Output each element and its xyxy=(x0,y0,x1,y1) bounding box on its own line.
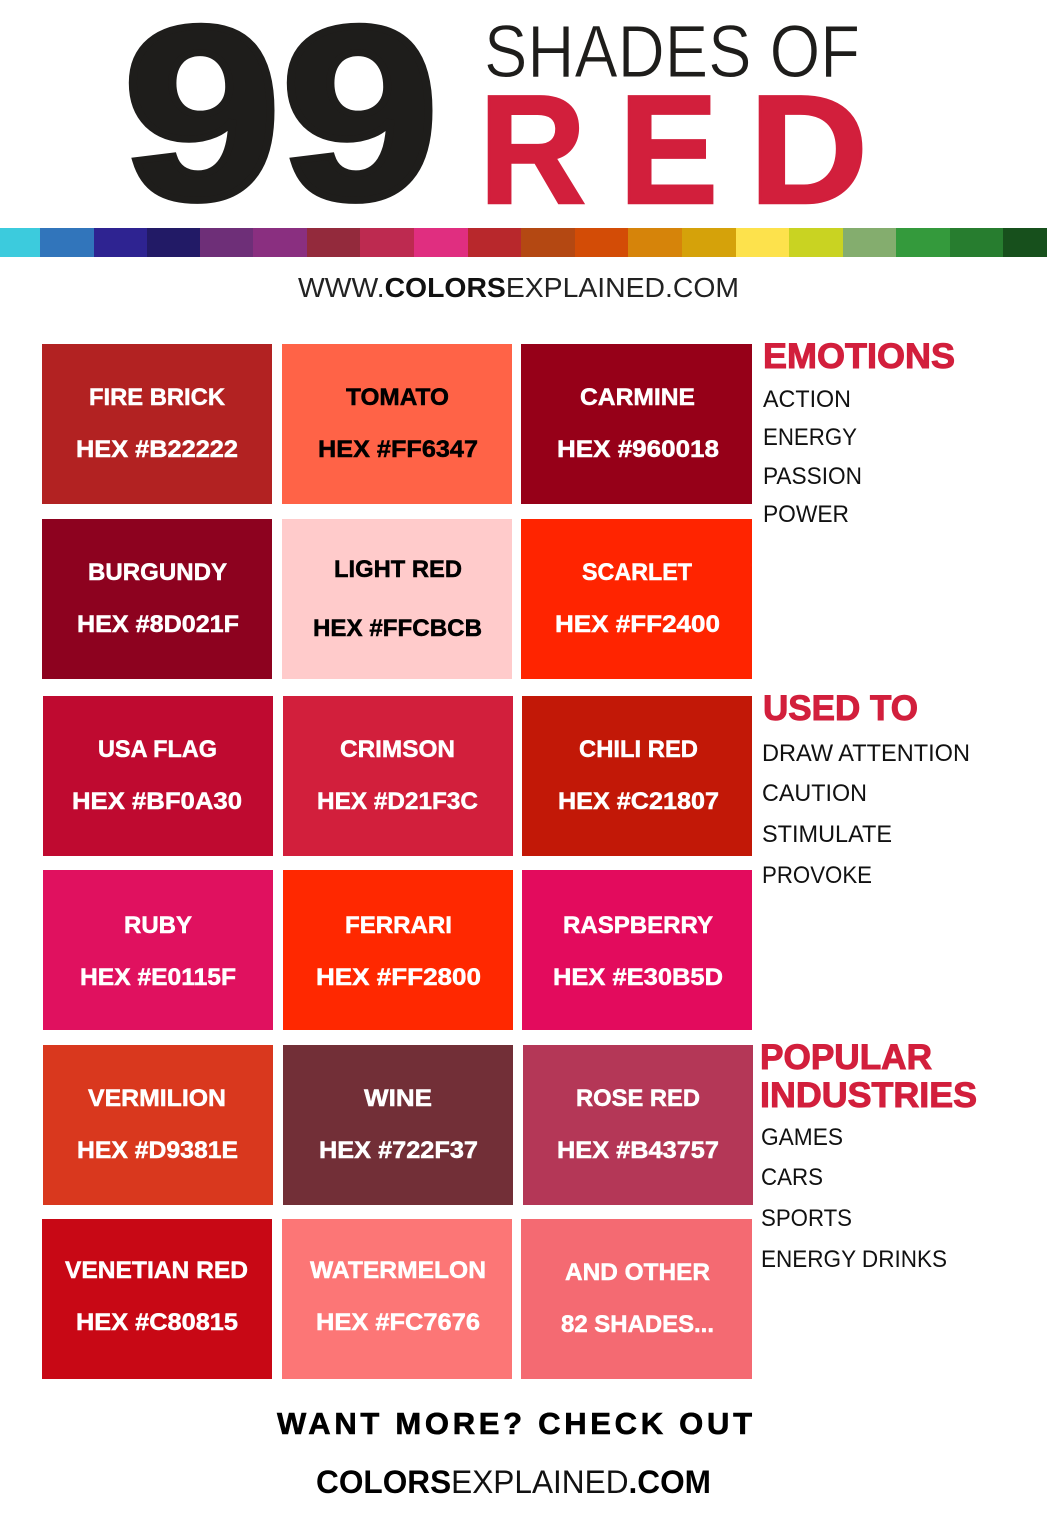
tile: carmine xyxy=(521,344,752,504)
heading: emotions: EMOTIONS xyxy=(763,337,955,376)
tile: chili red: HEX #C21807 xyxy=(558,788,719,815)
panel: emotions: POWER xyxy=(763,501,849,528)
panel: popular industries: ENERGY DRINKS xyxy=(761,1246,947,1273)
tile: wine: HEX #722F37 xyxy=(319,1137,478,1164)
tile: fire brick: FIRE BRICK xyxy=(89,384,225,411)
tile: burgundy: HEX #8D021F xyxy=(77,611,239,638)
panel: emotions: PASSION xyxy=(763,463,862,490)
tile: fire brick xyxy=(42,344,272,504)
tile: tomato xyxy=(282,344,512,504)
tile: rose red xyxy=(523,1045,753,1205)
tile: scarlet: HEX #FF2400 xyxy=(555,611,720,638)
tile: crimson xyxy=(283,696,513,856)
tile: usa flag xyxy=(43,696,273,856)
tile: scarlet xyxy=(521,519,752,679)
tile: tomato: HEX #FF6347 xyxy=(318,436,478,463)
tile: carmine: HEX #960018 xyxy=(557,436,719,463)
tile: carmine: CARMINE xyxy=(580,384,695,411)
title: red: D xyxy=(749,63,868,236)
panel: emotions: ACTION xyxy=(763,386,851,413)
tile: raspberry xyxy=(522,870,752,1030)
tile: ferrari: HEX #FF2800 xyxy=(316,964,481,991)
panel: popular industries: SPORTS xyxy=(761,1205,852,1232)
tile: other shades: 82 SHADES... xyxy=(561,1311,714,1338)
tile: vermilion: VERMILION xyxy=(88,1085,226,1112)
tile: watermelon: HEX #FC7676 xyxy=(316,1309,480,1336)
heading: used to: USED TO xyxy=(763,689,918,728)
rainbow colour strip xyxy=(0,228,1047,257)
title: red xyxy=(479,63,868,236)
call to action: WANT MORE? CHECK OUT xyxy=(277,1406,752,1441)
tile: light red: HEX #FFCBCB xyxy=(313,615,482,642)
tile: crimson: CRIMSON xyxy=(340,736,455,763)
tile: wine: WINE xyxy=(364,1085,432,1112)
tile: watermelon: WATERMELON xyxy=(310,1257,486,1284)
tile: usa flag: USA FLAG xyxy=(98,736,217,763)
title: red: E xyxy=(619,63,718,236)
title: red: R xyxy=(479,63,586,236)
website url: WWW.COLORSEXPLAINED.COM xyxy=(298,272,739,303)
tile: rose red: HEX #B43757 xyxy=(557,1137,719,1164)
panel: popular industries: CARS xyxy=(761,1164,823,1191)
tile: wine xyxy=(283,1045,513,1205)
tile: other shades xyxy=(521,1219,752,1379)
tile: light red: LIGHT RED xyxy=(334,556,462,583)
tile: ruby: HEX #E0115F xyxy=(80,964,236,991)
panel: used to: STIMULATE xyxy=(762,821,892,848)
tile: venetian red: HEX #C80815 xyxy=(76,1309,238,1336)
tile: tomato: TOMATO xyxy=(346,384,449,411)
panel: used to xyxy=(762,689,970,889)
tile: usa flag: HEX #BF0A30 xyxy=(72,788,242,815)
heading: popular industries: POPULAR xyxy=(760,1038,932,1077)
panel: emotions xyxy=(763,337,955,528)
tile: scarlet: SCARLET xyxy=(582,559,692,586)
tile: ferrari xyxy=(283,870,513,1030)
tile: other shades: AND OTHER xyxy=(565,1259,710,1286)
tile: venetian red xyxy=(42,1219,272,1379)
tile: raspberry: HEX #E30B5D xyxy=(553,964,723,991)
footer url: COLORSEXPLAINED.COM xyxy=(316,1464,711,1500)
panel: used to: DRAW ATTENTION xyxy=(762,740,970,767)
tile: ferrari: FERRARI xyxy=(345,912,452,939)
panel: used to: PROVOKE xyxy=(762,862,872,889)
tile: venetian red: VENETIAN RED xyxy=(65,1257,248,1284)
tile: ruby: RUBY xyxy=(124,912,192,939)
panel: emotions: ENERGY xyxy=(763,424,857,451)
tile: chili red xyxy=(522,696,752,856)
heading: popular industries: INDUSTRIES xyxy=(760,1076,977,1115)
tile: burgundy xyxy=(42,519,272,679)
panel: used to: CAUTION xyxy=(762,780,867,807)
panel: popular industries xyxy=(760,1038,977,1273)
tile: crimson: HEX #D21F3C xyxy=(317,788,478,815)
tile: fire brick: HEX #B22222 xyxy=(76,436,238,463)
tile: ruby xyxy=(43,870,273,1030)
tile: raspberry: RASPBERRY xyxy=(563,912,713,939)
tile: vermilion: HEX #D9381E xyxy=(77,1137,238,1164)
title: shades of: SHADES OF xyxy=(484,10,860,93)
tile: vermilion xyxy=(43,1045,273,1205)
tile: light red xyxy=(282,519,512,679)
panel: popular industries: GAMES xyxy=(761,1124,843,1151)
tile: rose red: ROSE RED xyxy=(576,1085,700,1112)
heading: popular industries xyxy=(760,1038,977,1115)
tile: chili red: CHILI RED xyxy=(579,736,698,763)
tile: burgundy: BURGUNDY xyxy=(88,559,227,586)
tile: watermelon xyxy=(282,1219,512,1379)
